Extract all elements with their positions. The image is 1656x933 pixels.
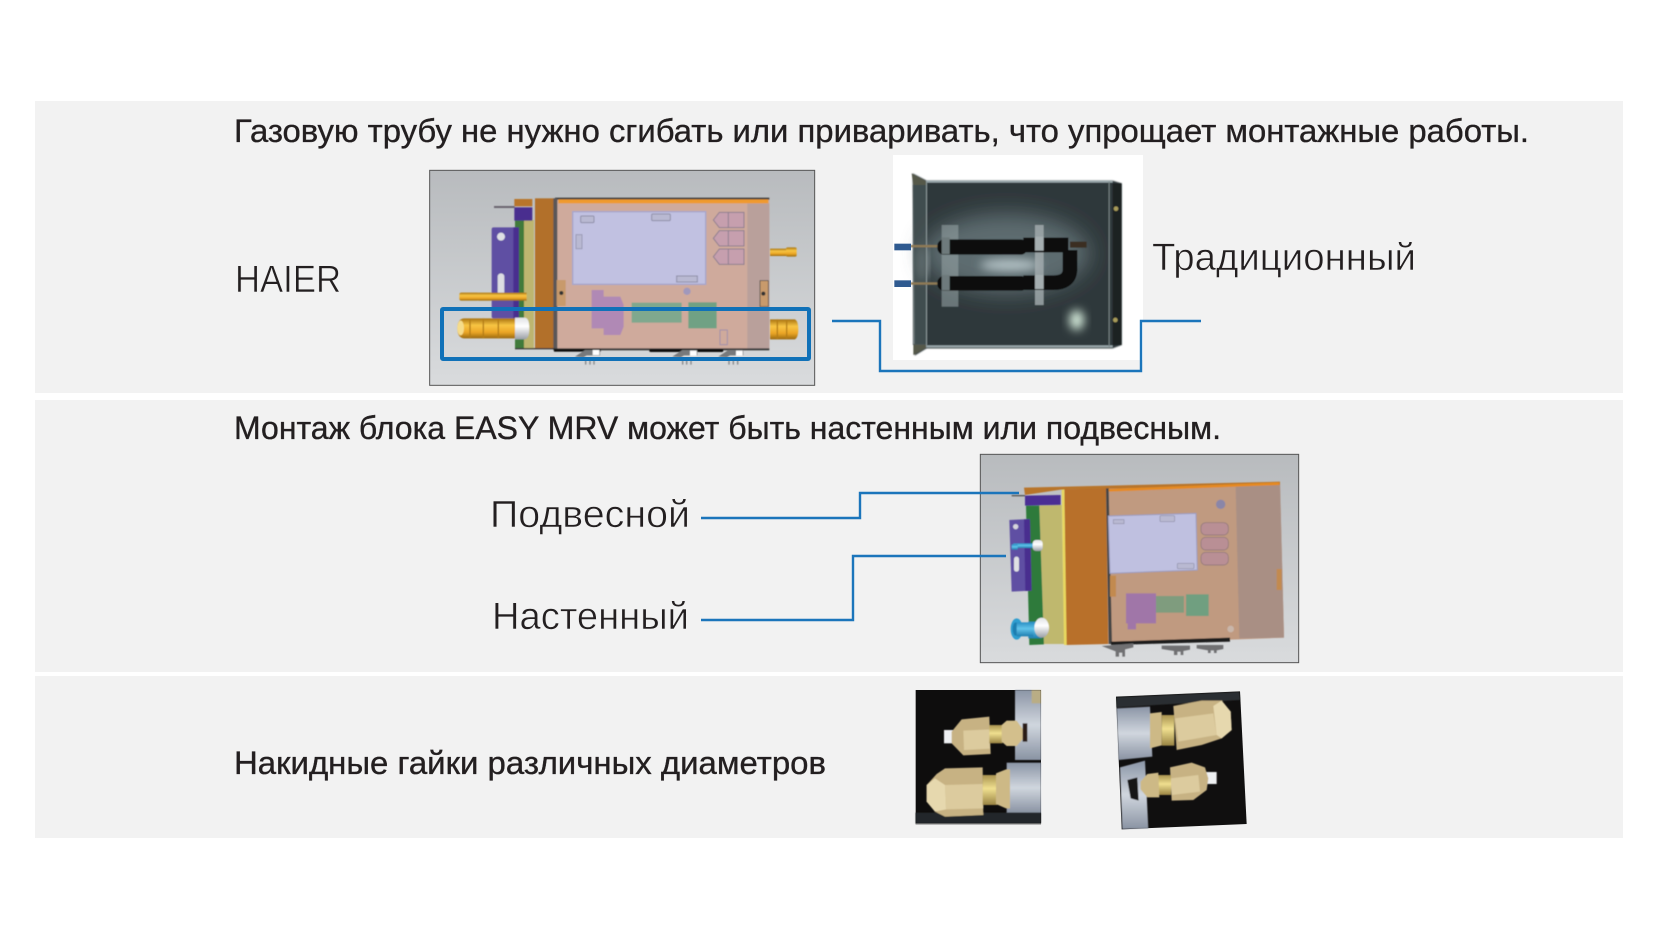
photo: flare nuts right [1116,691,1247,829]
panel: gas pipe comparison [35,101,1623,393]
label: wall-mounted: Настенный [492,596,689,638]
connector line: wall-mounted [701,556,1006,620]
heading: mounting: Монтаж блока EASY MRV может быть настенным или подвесным. [234,410,1221,446]
photo: traditional unit [893,155,1143,360]
image: HAIER unit drawing [430,170,815,385]
image: EASY MRV unit drawing [980,454,1299,663]
connector line: HAIER to traditional [832,321,1201,371]
connector line: suspended [701,493,1019,518]
photo: flare nuts left [916,690,1041,824]
label: HAIER: HAIER [235,259,341,301]
heading: gas pipe: Газовую трубу не нужно сгибать или приваривать, что упрощает монтажные работы. [234,113,1529,149]
panel: flare nuts [35,676,1623,838]
label: suspended: Подвесной [490,494,690,536]
label: traditional: Традиционный [1152,237,1416,279]
panel: mounting options [35,400,1623,672]
highlight: blue frame [442,309,809,359]
text: flare nuts: Накидные гайки различных диаметров [234,745,826,781]
